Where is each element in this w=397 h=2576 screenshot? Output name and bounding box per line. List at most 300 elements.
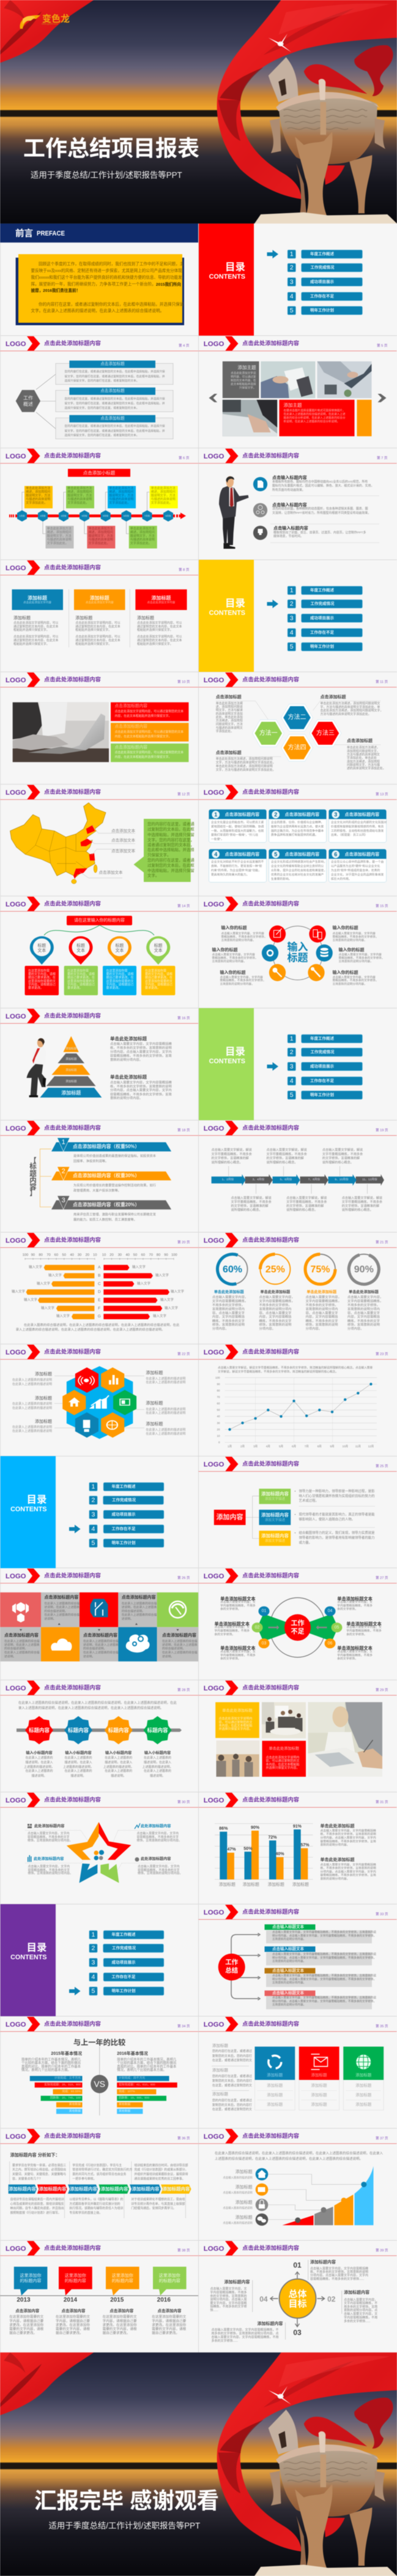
hex: method 2: 方法二 (288, 713, 306, 721)
card 4: 约束"的作用，为企业提供"利益"功能， (211, 868, 261, 872)
box 4: 在这里添加你需 (145, 968, 166, 973)
header: LOGO (6, 901, 26, 908)
slide 39: goals (198, 2241, 396, 2343)
column 3: 点击此处添加文字说明内容，可以 (137, 635, 182, 639)
item: chat (223, 2213, 268, 2226)
vertical title: 容 (29, 1183, 37, 1191)
goal 03 text (212, 2321, 283, 2343)
badges: 标题内容 (68, 1727, 89, 1733)
tile text bottom: 点击添加标题内容 (83, 1632, 117, 1638)
arrow chain: 7、8月份 (308, 1177, 321, 1181)
box 2: 选择只保留文字。您的内容打在这里，或者复制您的文本。 (65, 405, 139, 410)
top notes: 说所理解的核心概念。 (267, 1160, 297, 1164)
note 1: 单击此处添加方法 (26, 486, 50, 490)
2016: 的标题内容 (159, 2278, 180, 2283)
header: LOGO (6, 565, 26, 572)
contents list: 成功项目展示 (111, 1511, 136, 1516)
item 2: 点击输入标题文本 (272, 1946, 305, 1951)
header: 第 39 页 (376, 2248, 388, 2253)
column 3: 添加标题 (151, 595, 171, 601)
red root box (214, 1510, 246, 1525)
gray text panel: 此文本框粘贴并选择 (231, 382, 256, 386)
note 4: 单击此处添加方法 (151, 486, 176, 490)
labels: 余的文字修饰。 (337, 1607, 358, 1611)
green callout: 或者通过复制您的文本后， (147, 842, 195, 848)
column 3: 框粘贴并选择只保留文字。 (137, 642, 173, 646)
labels left: 需概括精炼，不用多余的文字修饰， (221, 935, 267, 939)
text block 2: 点击输入需要文字内容，文字内容需概括精 (110, 1080, 172, 1085)
cover slide (0, 0, 397, 224)
card 6: 点击添加标题内容 (345, 851, 379, 857)
upper notes: 通员课题成果转化优秀的员工回参事。 (134, 2177, 185, 2181)
item 4: 点击输入需要文字内容，文字内容需概括精炼，不用多余的文字修饰，言简意赅的说 (272, 1995, 376, 2000)
labels right: 添加标题 (146, 1421, 163, 1426)
bar 3 (51, 1196, 171, 1222)
contents list: 工作存在不足 (310, 1078, 334, 1083)
icon: gauge (169, 1601, 186, 1618)
header: 第 14 页 (177, 903, 190, 908)
left chevron (209, 394, 217, 402)
preface text box: 挥。展望新的一年，我们将继续努力，力争各项工作更上一个新台阶。2015我们所向 (31, 281, 181, 287)
chevron chain (9, 2185, 191, 2194)
column text 2: 在此录入上述图表的 (64, 1769, 92, 1773)
guide lines (10, 2161, 185, 2218)
arrow (267, 250, 278, 258)
header: 点击此处添加标题内容 (242, 1572, 300, 1579)
header: 第 27 页 (376, 1575, 388, 1580)
column 2 text: 点击输入需要文字内容， (259, 1295, 295, 1300)
column 4 text: 言简意赅的说明分项内 (347, 1306, 380, 1311)
bar labels: 输入文字 (160, 1297, 174, 1302)
column text 3: 描述说明。 (111, 1774, 126, 1778)
chevron chain: 添加标题内容 (70, 2186, 97, 2192)
card 5: 点击添加标题内容 (285, 851, 319, 857)
card 1: 一处使"。 (211, 837, 224, 842)
label top left: 容需概括精炼，不用多余的文字 (28, 1835, 70, 1839)
goal 01 text: 炼，不用多余的文字修饰，言简意赅的说明 (310, 2270, 368, 2274)
arrow chain: 3、4月份 (253, 1177, 265, 1181)
top notes: 点击输入需要文字解说，解说 (212, 1148, 252, 1152)
header: 第 30 页 (177, 1799, 190, 1804)
upper notes: 关键词、关键句、关键观念、关键策略与 (12, 2172, 66, 2177)
label top right: 此处添加标题内容 (141, 1824, 171, 1829)
label top right: 容需概括精炼，不用多余的文字 (137, 1835, 179, 1839)
contents panel (0, 1904, 56, 2016)
2013: 求更改。在这里添加你 (9, 2322, 44, 2327)
icon: storm cloud (51, 1638, 72, 1651)
labels right: 在此录入上述图表的描述说明 (146, 1428, 185, 1432)
line chart: 10 (217, 1434, 220, 1437)
center circle (284, 1614, 311, 1641)
header (198, 1681, 396, 1695)
card: mail: 添加标题 (311, 2101, 327, 2107)
goal 04 text: 说明分项内容。点击输入需 (210, 2297, 247, 2302)
column 4 text: 容。点击输入需要文字 (347, 1310, 380, 1315)
item 2 (253, 502, 371, 518)
slide 4 (0, 336, 198, 439)
2014: 据自己要求更改。 (56, 2330, 83, 2335)
lower notes: 门经理沟通后，安排同步再学习。 (131, 2206, 176, 2210)
axes (23, 1254, 177, 1260)
header: 第 16 页 (177, 1015, 190, 1020)
description list: 艺术或过程。 (299, 1498, 319, 1503)
header: 点击此处添加标题内容 (44, 1348, 102, 1355)
box 1: 在这里添加你需 (28, 968, 50, 973)
2014: 2014 (64, 2297, 78, 2303)
category letters: C (98, 1282, 101, 1286)
column 1 text: 修饰，言简意赅的说明 (212, 1322, 245, 1327)
text block 2: 练，不用多余的文字修饰，言简意赅的说明 (321, 1866, 376, 1870)
ring 75% (305, 1254, 335, 1284)
contents list: 5 (290, 643, 294, 650)
left column: 情况，表明几个比较的基本方面。 (21, 2068, 71, 2073)
box 4: 这里添加你需要的文 (145, 979, 173, 983)
direction arrows (270, 2272, 324, 2327)
numbered nodes: 02 (255, 1625, 259, 1630)
chart caption (16, 1322, 180, 1332)
header: 第 13 页 (376, 791, 388, 796)
ring 25% (260, 1254, 290, 1284)
box 3 (56, 415, 173, 439)
2016: 2016 (157, 2297, 171, 2303)
left bars (26, 1265, 94, 1319)
column 3 text (306, 1295, 341, 1331)
node labels: 3月份 (61, 514, 67, 517)
contents list: 3 (290, 1063, 294, 1070)
column chart (215, 1824, 313, 1887)
card: globe: 添加标题 (355, 2082, 372, 2088)
header: 第 26 页 (177, 1575, 190, 1580)
contents list: 1 (91, 1931, 95, 1938)
card: globe (343, 2047, 384, 2110)
map labels: 点击添加文本 (99, 870, 123, 875)
column text 4: 上述图表的描述说明， (142, 1764, 173, 1769)
header: 点击此处添加标题内容 (44, 676, 102, 683)
gray arrow bar (17, 1728, 182, 1732)
labels left (12, 1371, 52, 1433)
2014: 在这里添加你需要的文 (56, 2314, 90, 2319)
2015: 据自己要求更改。 (103, 2330, 130, 2335)
pin 3: 标题 (116, 943, 124, 948)
header: 点击此处添加标题内容 (44, 900, 102, 907)
contents panel (199, 560, 254, 672)
left text column: 添加标题 (212, 2067, 228, 2073)
labels (214, 1596, 382, 1661)
labels: 单击添加标题文本 (346, 1621, 382, 1627)
box 4: 要求更改。 (145, 986, 160, 990)
column text 1: 描述说明，在此录入 (25, 1760, 53, 1764)
axes: 80 (39, 1254, 43, 1257)
yellow tile: 并选择只保留文字内容。 (219, 1727, 253, 1731)
header: LOGO (204, 1461, 224, 1469)
vertical title: 【 (29, 1157, 37, 1165)
column 4 text: 不用多余的文字修饰， (347, 1302, 380, 1307)
column text 1: 输入小标题内容 (26, 1750, 53, 1755)
box 2: 留文字。您的内容打在这里，或者通过复制您的文本后，在此框中选择粘贴，并 (65, 401, 165, 405)
preface text box: 披靡，2016我们勇往直前！ (31, 288, 80, 293)
tile text top: 点击添加标题内容 (122, 1594, 156, 1600)
note 3: 文字添加此处。 (109, 501, 130, 505)
labels: 字内容需概括精炼，不用多 (220, 1653, 256, 1657)
intro text: 文字解说，解说文字尽量概括精炼，不用多余的文字修饰，简洁精准的解说所理解的核心概念。 (218, 1369, 338, 1374)
closing slide (0, 2352, 397, 2576)
bracket (40, 1149, 51, 1207)
blue box: 添加文字描述 (265, 1517, 285, 1522)
contents list: 成功项目展示 (310, 279, 334, 284)
bar labels: 输入文字 (155, 1273, 169, 1278)
axes: 40 (70, 1254, 74, 1257)
contents list: 工作存在不足 (310, 630, 334, 635)
contents list: 4 (91, 1525, 95, 1532)
axes: 100 (23, 1254, 28, 1257)
line chart: 12月 (368, 1445, 374, 1448)
China map (10, 803, 106, 884)
goal 04 text: 余的文字修饰，言简意赅的 (210, 2294, 247, 2298)
card 3 (329, 810, 387, 843)
header: 第 35 页 (376, 2024, 388, 2028)
left text column: 复制您的文本后，您的内容打 (212, 2054, 252, 2058)
note 6: 阐述，添加简短问 (89, 530, 113, 534)
badges: 标题内容 (108, 1727, 129, 1733)
line chart: 60 (217, 1402, 220, 1405)
leader lines (54, 1376, 144, 1428)
tile backgrounds (0, 1592, 198, 1662)
green callout: 中选择粘贴，并选择只保留 (147, 832, 195, 837)
bottom notes: 的文字修饰，言语精准的解 (342, 1204, 379, 1208)
slide 11 (198, 672, 396, 772)
item: battery: 添加标题 (236, 2184, 253, 2190)
bottom notes: 说所理解的核心概念。 (286, 1208, 317, 1212)
pyramid (40, 1036, 102, 1098)
column text 4: 描述说明，在此录入 (144, 1760, 171, 1764)
slide 25 (198, 1456, 396, 1546)
comparison title: 与上一年的比较 (73, 2038, 125, 2047)
header (198, 2017, 396, 2032)
note 3: 单击此处添加方法 (109, 486, 133, 490)
line chart: 10月 (342, 1445, 348, 1448)
label bottom right: 添加简短问题说明文字， (347, 749, 380, 753)
bar 1 (51, 1138, 171, 1163)
preface header bar (0, 224, 198, 243)
lower notes (10, 2198, 185, 2215)
contents list: 1 (91, 1483, 95, 1491)
map leader lines (80, 826, 135, 878)
column chart: 47% (227, 1847, 236, 1852)
blue box: 添加标题内容 (261, 1512, 289, 1518)
item 1: 言简意赅的说明分项内容。 (272, 1937, 306, 1941)
card: recycle (254, 2047, 295, 2110)
arrow (267, 1062, 278, 1071)
labels: 单击添加标题文本 (220, 1596, 256, 1602)
labels left: 添加标题 (35, 1371, 52, 1377)
label bottom left: 此处添加标题内容 (34, 1856, 64, 1861)
header (198, 1456, 396, 1471)
label top left: 点击输入需要文字内容，文字内 (28, 1831, 70, 1836)
column 2 text: 言简意赅的说明分项内 (259, 1306, 291, 1311)
badges (25, 1716, 171, 1744)
header: 点击此处添加标题内容 (44, 340, 102, 347)
red bar (111, 702, 188, 721)
bar labels: 输入文字 (153, 1314, 167, 1319)
red bar: 点击此处添加文字说明内容，可以通过复制您的文本 (115, 709, 184, 714)
left column: 个比较的基本方面，结合下面的图形做出 (21, 2060, 81, 2065)
column chart: 40% (275, 1852, 284, 1856)
description list: • (295, 1489, 296, 1493)
box 2: 这里添加你需要的文 (67, 979, 95, 983)
axes: 60 (141, 1254, 145, 1257)
tile text top (44, 1594, 157, 1621)
lower notes: 训专员统计再作名单，与其直接上级探部 (131, 2202, 185, 2206)
item 1: 本模板所有颜色、图标均符合中国移动面向4G业务以后的VIS规范，所有 (272, 480, 368, 484)
note 6: 题说明文字，方法 (89, 534, 113, 538)
header: 第 5 页 (377, 343, 388, 348)
2016: 需要的文字内容，请根 (152, 2326, 187, 2331)
goal 01 text: 容需概括精炼，不用多余的文字修饰...... (310, 2277, 364, 2281)
contents panel: CONTENTS (209, 609, 245, 617)
card 4: 4 (214, 851, 217, 857)
upper notes: 一把手参与审核。 (72, 2177, 97, 2181)
2016: 在这里添加你需要的文 (152, 2314, 187, 2319)
header: 第 22 页 (177, 1351, 190, 1356)
contents list (288, 586, 362, 651)
slide 7 (198, 448, 396, 549)
green callout: 在此框中选择粘贴，并选择 (147, 846, 195, 853)
column text 2: 描述说明。 (70, 1774, 86, 1778)
line chart: 9月 (330, 1445, 335, 1448)
left text column: 在这里，或者通过复制您的文 (212, 2058, 252, 2063)
header (198, 1121, 396, 1135)
item 1: 点击输入标题文本 (272, 1924, 305, 1929)
header: LOGO (204, 2021, 224, 2028)
header: LOGO (6, 2245, 26, 2253)
header: LOGO (204, 341, 224, 348)
card 2: 企业的愿景、信仰、价值观与企业精神， (271, 820, 324, 824)
label bottom right: 字添加此处。单击此处 (347, 756, 377, 760)
column 2: 通过复制您的文本内容，在此文本 (75, 625, 121, 628)
label top left (216, 694, 243, 734)
item 2: 点击输入标题内容 (272, 502, 307, 507)
column 1: 添加标题 (13, 615, 31, 620)
label top right: 击此处添加方法阐述，添加简短问题说明文字， (321, 708, 383, 713)
analysis title: 添加标题内容 分析如下： (10, 2152, 60, 2158)
yellow tile: 点击此处添加文字说明内 (219, 1717, 253, 1721)
card: mail: 添加标题 (311, 2082, 327, 2088)
axes: 20 (109, 1254, 114, 1257)
column 3: 点击此处添加文字说明内容，可以 (137, 621, 182, 625)
column 2 text: 容。点击输入需要文字 (259, 1310, 291, 1315)
bar labels: 输入文字 (24, 1297, 37, 1302)
slide 29: photo collage (198, 1681, 396, 1777)
icon: gear (262, 944, 278, 962)
hex: method 2 (281, 704, 313, 731)
label bottom right: 点击输入需要文字内容，文字内 (138, 1864, 180, 1869)
text block 1: 分项内容。点击输入需要文字内容，文字内 (110, 1049, 172, 1054)
header: 点击此处添加标题内容 (242, 1124, 300, 1131)
card 2: 能够为企业提供两有长远激力点。使大家 (271, 824, 324, 829)
closing subtitle: 适用于季度总结/工作计划/述职报告等PPT (49, 2521, 200, 2531)
labels left: 在此录入上述图表的描述说明 (12, 1401, 52, 1406)
2015: 这里添加你 (112, 2272, 133, 2278)
box 1: 据自己要求更改。在 (28, 976, 56, 980)
connectors (22, 492, 150, 534)
VS badge (91, 2075, 108, 2093)
goal circle (279, 2279, 316, 2318)
card 3: 企业文化对内形成的企业内部的文化氛围对 (331, 820, 387, 824)
contents list (288, 1034, 362, 1099)
card 6: 企业文化，对于提升企业的品牌形象将发 (331, 872, 384, 877)
contents list: 3 (91, 1511, 95, 1518)
chevron chain: 添加标题内容 (39, 2186, 67, 2192)
contents list: 年度工作概述 (111, 1483, 136, 1489)
header: 点击此处添加标题内容 (44, 2021, 102, 2027)
header: 第 28 页 (177, 1687, 190, 1692)
contents panel: 目录 (27, 1494, 46, 1505)
bottom notes: 的文字修饰，言语精准的解 (231, 1204, 269, 1208)
card 4: 点击添加标题内容 (225, 851, 259, 857)
numbered nodes: 06 (328, 1641, 332, 1646)
arrow chain: 5、6月份 (280, 1177, 292, 1181)
tile text bottom: 在此录入上述图表的综合描 (162, 1639, 198, 1643)
labels left: 添加标题 (35, 1418, 52, 1424)
tile text bottom: 的综合描述说明。 (83, 1646, 106, 1651)
yellow tile: 容，可以通过复制您的文 (219, 1720, 253, 1724)
top notes: 点击输入需要文字解说，解说 (322, 1148, 363, 1152)
text block 1 (110, 1035, 172, 1062)
column chart: 72% (268, 1836, 277, 1840)
header (0, 336, 198, 351)
contents list (89, 1930, 164, 1995)
header: 点击此处添加标题内容 (242, 1460, 300, 1467)
bottom notes: 文字尽量概括精炼，不用多余 (231, 1200, 272, 1204)
header (0, 672, 198, 687)
left column (21, 2051, 82, 2114)
tile text top: 在此录入上述图表的综合描 (122, 1613, 157, 1617)
column 2: 点击此处添加文字内容 (86, 600, 114, 604)
header: 第 20 页 (177, 1240, 190, 1245)
green box: 添加文字描述 (265, 1496, 285, 1501)
bottom notes: 说所理解的核心概念。 (342, 1208, 373, 1212)
header (0, 448, 198, 463)
green callout: 过复制您的文本后，在此框 (147, 862, 195, 868)
bar labels: 输入文字 (37, 1281, 50, 1286)
slide 18: weights (0, 1121, 198, 1222)
label top left: 述，添加简短问题说 (216, 704, 243, 709)
column 1 text: 分项内容。 (212, 1326, 228, 1331)
column 4 text: 点击输入需要文字内容， (347, 1295, 383, 1300)
item: home: 添加标题 (236, 2169, 253, 2174)
category letters: B (98, 1274, 100, 1278)
pin 1: 标题 (37, 943, 46, 948)
goal circle: 目标 (288, 2299, 307, 2309)
description list (295, 1488, 375, 1545)
column 4 text: 分项内容。 (347, 1326, 363, 1331)
bar labels: 输入文字 (41, 1305, 54, 1310)
preface text box: 要反映于xx及xxx的风格、定制还有待进一步探索，尤其是网上的公司产品库充分体现 (31, 268, 182, 273)
axes: 30 (78, 1254, 81, 1257)
red tile: 点击此处添加文字说明内 (265, 1755, 300, 1760)
center title: 输入 (288, 941, 308, 953)
column 3 text: 文字内容需要概括精炼， (306, 1298, 341, 1303)
green callout: 只保留文字。 (147, 852, 171, 857)
left text column: 添加标题 (212, 2091, 228, 2096)
header (0, 2129, 198, 2144)
right column: 计划完成：四千万元 (119, 2076, 145, 2080)
goal 01 text (310, 2259, 368, 2281)
upper notes: 案的共同与方式。该月组织导员也由业务 (72, 2172, 127, 2177)
axes: 90 (164, 1254, 168, 1257)
column 3: 通过复制您的文本内容，在此文本 (137, 638, 182, 642)
header: 点击此处添加标题内容 (44, 2133, 102, 2139)
